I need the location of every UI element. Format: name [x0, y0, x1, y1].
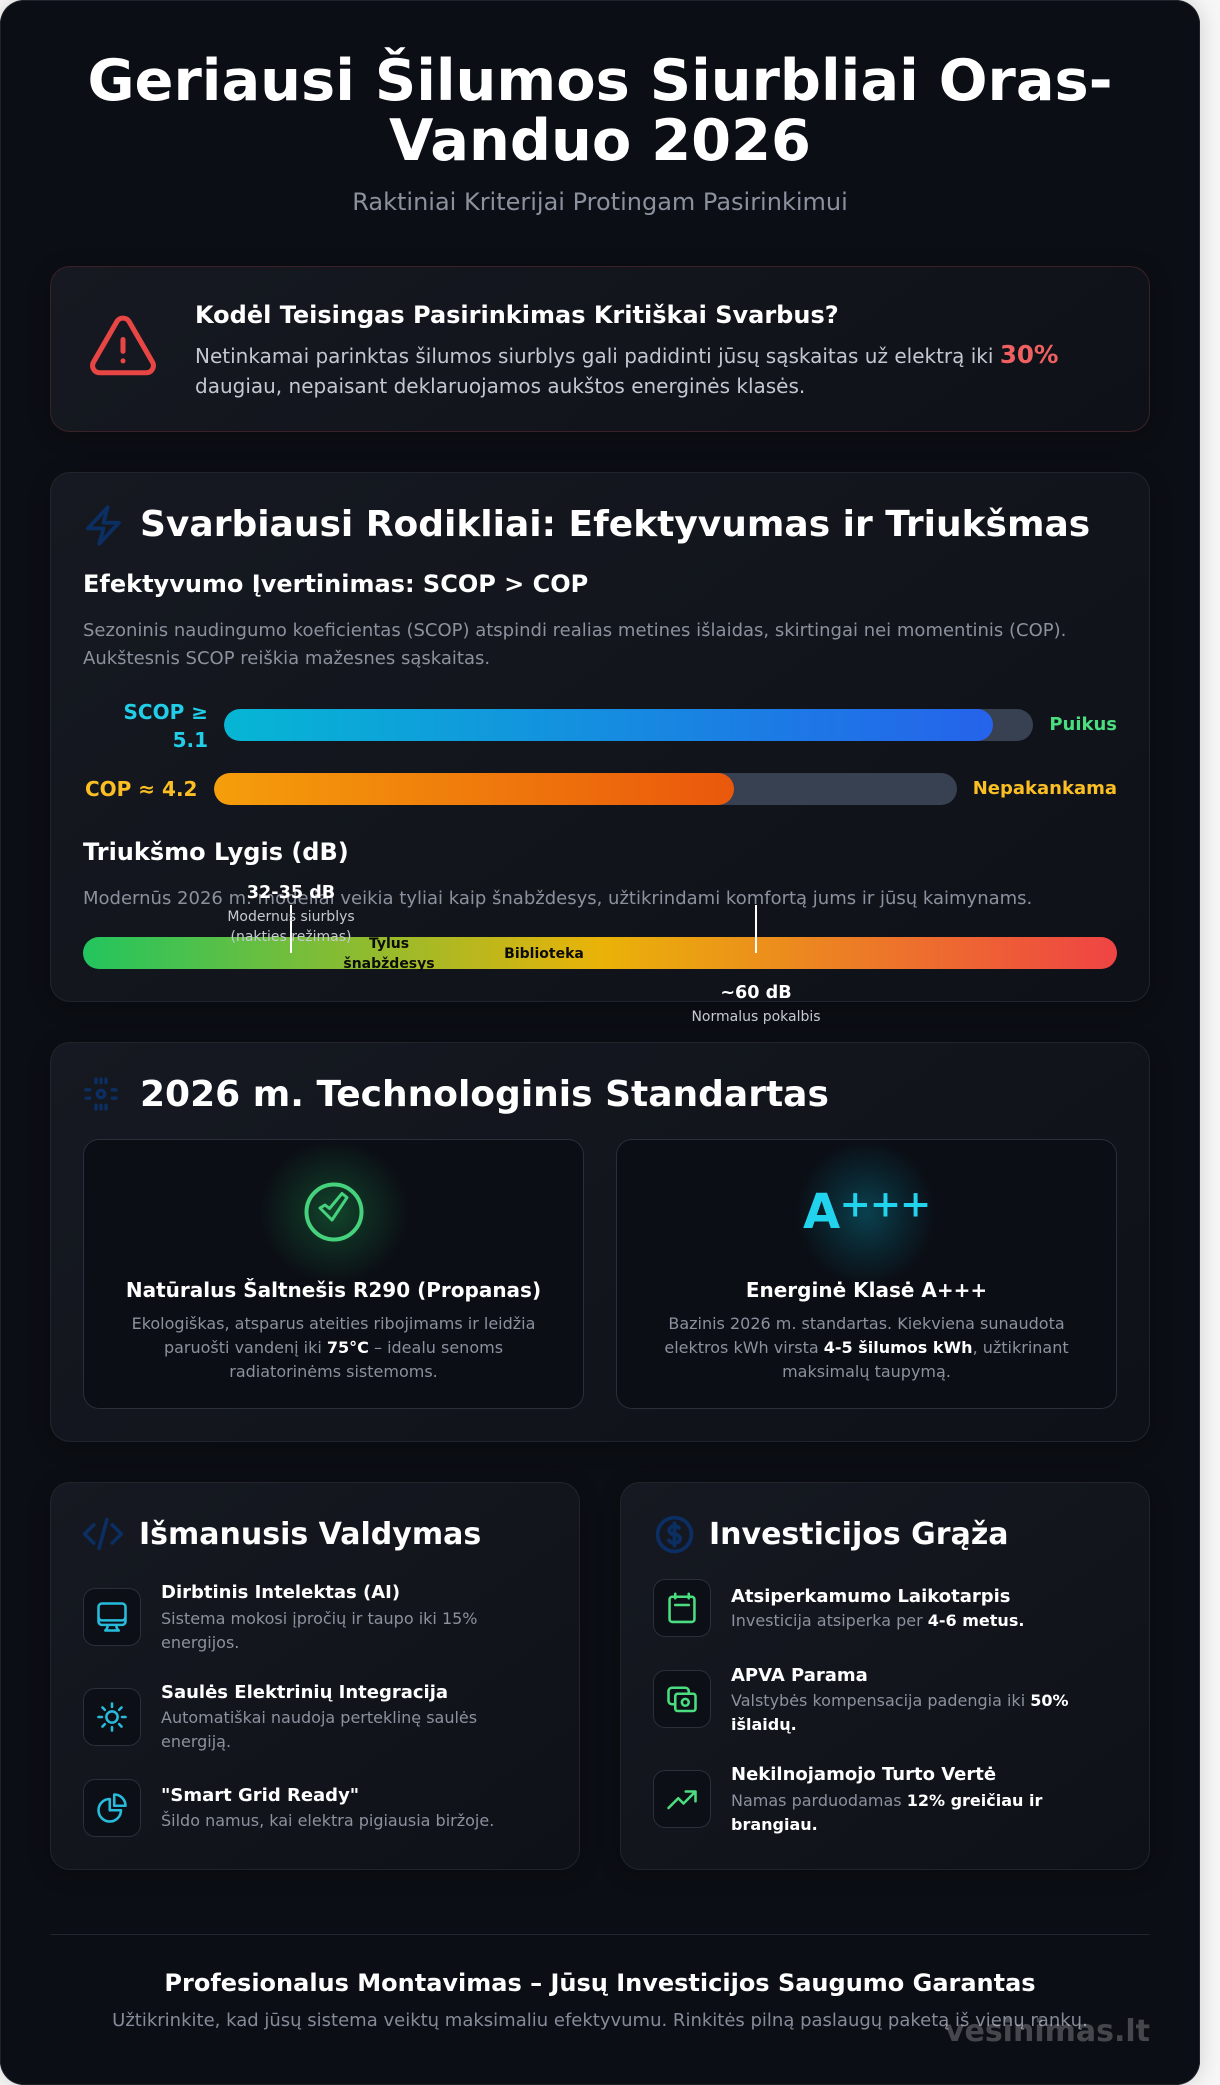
- icon glow and check badge: [271, 1152, 397, 1272]
- item: payback: [653, 1579, 1024, 1637]
- item text: energijos.: [161, 1633, 239, 1652]
- alert text: Netinkamai parinktas šilumos siurblys gali padidinti jūsų sąskaitas už elektrą iki 30%: [195, 340, 1058, 369]
- title: Geriausi Šilumos Siurbliai Oras-: [87, 47, 1113, 114]
- section heading: Investicijos Grąža: [709, 1517, 1009, 1552]
- icon: warning triangle: [90, 316, 156, 376]
- marker: 32-35 dB: [227, 883, 355, 953]
- item title: "Smart Grid Ready": [161, 1785, 359, 1806]
- panel: why the right choice matters: [50, 266, 1150, 432]
- icon: monitor: [83, 1588, 141, 1646]
- item title: Dirbtinis Intelektas (AI): [161, 1582, 400, 1603]
- efficiency description: Aukštesnis SCOP reiškia mažesnes sąskaitas.: [83, 648, 490, 669]
- icon: bolt: [86, 505, 121, 546]
- bar: SCOP: [224, 709, 1033, 741]
- panel: technology standard: [50, 1042, 1150, 1442]
- label: Nepakankama: Nepakankama: [973, 778, 1117, 799]
- scale label: library: Biblioteka: [504, 946, 584, 962]
- efficiency description: [83, 620, 1066, 669]
- icon: pie chart: [83, 1779, 141, 1837]
- title: Vanduo 2026: [389, 107, 811, 174]
- item text: energiją.: [161, 1732, 231, 1751]
- alert text: [195, 340, 1058, 398]
- panel: key metrics: [50, 472, 1150, 1002]
- label: SCOP value: 5.1: [173, 728, 208, 752]
- footer text: Užtikrinkite, kad jūsų sistema veiktų maksimaliu efektyvumu. Rinkitės pilną paslaugų paketą iš vienų rankų.: [112, 2010, 1088, 2031]
- item: property value: [653, 1764, 1042, 1834]
- marker value: ~60 dB: [720, 983, 792, 1003]
- label: SCOP value: SCOP ≥: [124, 700, 208, 724]
- item text: brangiau.: [731, 1815, 818, 1834]
- subtitle: Raktiniai Kriterijai Protingam Pasirinkimui: [352, 188, 848, 216]
- label: SCOP value: [124, 700, 208, 752]
- watermark: vesinimas.lt: [945, 2014, 1150, 2049]
- section heading: Išmanusis Valdymas: [139, 1517, 481, 1552]
- card text: paruošti vandenį iki 75°C – idealu senoms: [164, 1338, 503, 1357]
- efficiency description: Sezoninis naudingumo koeficientas (SCOP) atspindi realias metines išlaidas, skirtingai nei momentinis (COP).: [83, 620, 1066, 641]
- item text: Investicija atsiperka per 4-6 metus.: [731, 1611, 1024, 1630]
- item title: Nekilnojamojo Turto Vertė: [731, 1764, 996, 1785]
- item title: APVA Parama: [731, 1665, 868, 1686]
- noise scale bar: [83, 937, 1117, 969]
- section heading: Svarbiausi Rodikliai: Efektyvumas ir Triukšmas: [140, 504, 1090, 545]
- item text: [731, 1791, 1042, 1834]
- marker value: 32-35 dB: [247, 883, 335, 903]
- item text: išlaidų.: [731, 1715, 797, 1734]
- item title: Saulės Elektrinių Integracija: [161, 1682, 448, 1703]
- title: [87, 47, 1113, 174]
- card title: Natūralus Šaltnešis R290 (Propanas): [126, 1278, 541, 1302]
- marker caption: Modernus siurblys: [227, 909, 355, 925]
- item: solar: [83, 1682, 477, 1751]
- card text: elektros kWh virsta 4-5 šilumos kWh, užtikrinant: [664, 1338, 1069, 1357]
- icon: calendar: [653, 1579, 711, 1637]
- label: COP value: COP ≈ 4.2: [85, 777, 197, 801]
- bar: COP: [214, 773, 957, 805]
- item text: Namas parduodamas 12% greičiau ir: [731, 1791, 1042, 1810]
- item text: [161, 1609, 478, 1652]
- marker caption: [227, 909, 355, 945]
- card text: radiatorinėms sistemoms.: [229, 1362, 438, 1381]
- alert heading: Kodėl Teisingas Pasirinkimas Kritiškai Svarbus?: [195, 301, 839, 329]
- card text: maksimalų taupymą.: [782, 1362, 951, 1381]
- card: energy class: [616, 1139, 1117, 1409]
- footer heading: Profesionalus Montavimas – Jūsų Investicijos Saugumo Garantas: [164, 1969, 1036, 1997]
- item: APVA support: [653, 1665, 1069, 1734]
- item text: Automatiškai naudoja perteklinę saulės: [161, 1708, 477, 1727]
- alert text: daugiau, nepaisant deklaruojamos aukštos energinės klasės.: [195, 374, 805, 398]
- card text: Ekologiškas, atsparus ateities ribojimams ir leidžia: [132, 1314, 535, 1333]
- item text: Valstybės kompensacija padengia iki 50%: [731, 1691, 1069, 1710]
- card text: Bazinis 2026 m. standartas. Kiekviena sunaudota: [668, 1314, 1065, 1333]
- icon: code: [82, 1518, 124, 1550]
- noise subheading: Triukšmo Lygis (dB): [83, 838, 349, 866]
- icon: banknotes: [653, 1670, 711, 1728]
- scale label: whisper: šnabždesys: [343, 956, 435, 972]
- panel: smart control: [50, 1482, 580, 1870]
- marker: 60 dB: [691, 905, 821, 1025]
- item text: Šildo namus, kai elektra pigiausia biržoje.: [161, 1811, 494, 1830]
- label: Puikus: Puikus: [1049, 714, 1117, 735]
- item text: [161, 1708, 477, 1751]
- marker line: [290, 905, 292, 953]
- card title: Energinė Klasė A+++: [746, 1278, 987, 1302]
- icon: dollar circle: [656, 1516, 694, 1554]
- marker caption: (nakties režimas): [230, 929, 352, 945]
- card text: [132, 1314, 535, 1381]
- item title: Atsiperkamumo Laikotarpis: [731, 1586, 1011, 1607]
- marker line: [755, 905, 757, 953]
- item text: [731, 1691, 1069, 1734]
- scale label: whisper: Tylus: [369, 936, 409, 952]
- energy class badge: A+++: [803, 1184, 931, 1240]
- panel: return on investment: [620, 1482, 1150, 1870]
- card: R290 refrigerant: [83, 1139, 584, 1409]
- icon: trend up: [653, 1770, 711, 1828]
- item: smart grid: [83, 1779, 494, 1837]
- section heading: 2026 m. Technologinis Standartas: [140, 1074, 829, 1115]
- item: AI: [83, 1582, 478, 1652]
- icon: chip: [84, 1077, 118, 1111]
- icon: sun: [83, 1688, 141, 1746]
- efficiency subheading: Efektyvumo Įvertinimas: SCOP > COP: [83, 570, 588, 598]
- marker caption: Normalus pokalbis: [691, 1009, 821, 1025]
- item text: Sistema mokosi įpročių ir taupo iki 15%: [161, 1609, 478, 1628]
- card text: [664, 1314, 1069, 1381]
- icon glow: [796, 1140, 936, 1286]
- noise description: Modernūs 2026 m. modeliai veikia tyliai kaip šnabždesys, užtikrindami komfortą jums ir jūsų kaimynams.: [83, 888, 1032, 909]
- scale label: whisper: [343, 936, 435, 972]
